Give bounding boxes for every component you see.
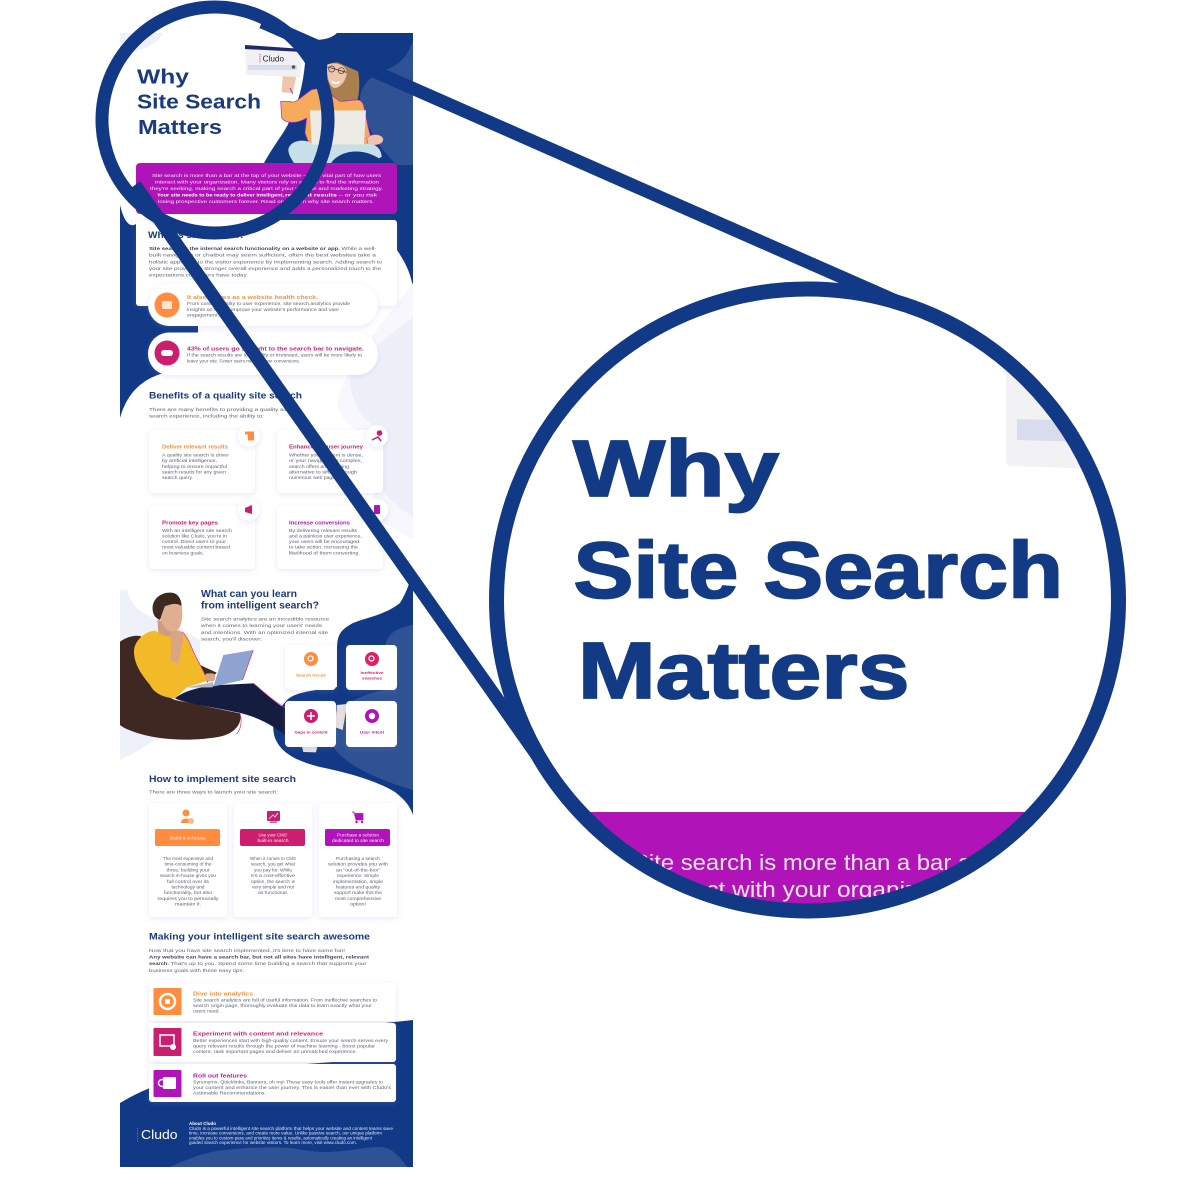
card: CMS built-in search: you pay for. While xyxy=(254,867,293,872)
card: build in-house: The most expensive and xyxy=(163,856,214,861)
tile: user intent xyxy=(346,701,397,747)
heading: making your site search awesome: Making your intelligent site search awesome xyxy=(149,932,370,942)
panel: intro banner xyxy=(136,163,397,214)
heading: making your site search awesome xyxy=(149,932,370,973)
heading: Why Site Search Matters: Matters xyxy=(138,117,222,139)
card: build in-house: search in-house gives you xyxy=(160,873,217,878)
callout: website health check: insights on how to improve your website's performance and user xyxy=(187,307,339,312)
card: promote key pages: control. Direct users to your xyxy=(162,539,226,544)
card: build in-house: maintain it. xyxy=(175,902,201,907)
enlarged search card fragment xyxy=(1006,370,1080,468)
enlarged heading: Site Search xyxy=(574,526,1063,614)
tip: dive into analytics: Dive into analytics xyxy=(193,992,253,998)
heading: what can you learn: Site search analytics are an incredible resource xyxy=(201,616,329,622)
card: increase conversions xyxy=(277,499,388,569)
heading: Why Site Search Matters: Why xyxy=(137,66,190,88)
card: deliver relevant results: search query. xyxy=(162,475,193,480)
panel: long infographic xyxy=(120,33,413,1167)
background shapes xyxy=(120,33,413,1167)
tip: dive into analytics xyxy=(149,983,396,1021)
card: purchase a solution: features and quality xyxy=(336,884,381,890)
card: Cludo search mockup xyxy=(245,45,303,77)
panel: what is site search xyxy=(136,220,397,306)
card: increase conversions: By delivering relevant results xyxy=(289,528,358,533)
heading: benefits: Benefits of a quality site search xyxy=(149,390,302,400)
heading: making your site search awesome: Now that you have site search implemented, it's time to have some fun! xyxy=(149,948,345,953)
card: build in-house xyxy=(149,803,227,917)
heading: what can you learn xyxy=(201,589,329,642)
heading: making your site search awesome: That's up to you. Spend some time building a search that supports your xyxy=(170,961,367,966)
heading: what can you learn: search, you'll discover: xyxy=(201,636,262,642)
heading: what can you learn: and intentions. With an optimized internal site xyxy=(201,630,329,635)
card: deliver relevant results: by artificial intelligence, xyxy=(162,458,217,463)
enlarged ring xyxy=(496,289,1118,911)
heading: benefits: search experience, including the ability to: xyxy=(149,414,264,418)
magnifier connector: lower line xyxy=(135,185,553,778)
card: deliver relevant results: A quality site search is driver xyxy=(162,452,229,458)
tile: user intent: User intent xyxy=(360,730,385,734)
heading: Why Site Search Matters xyxy=(137,68,260,134)
card: deliver relevant results: Deliver relevant results xyxy=(162,444,228,450)
card: purchase a solution: Purchasing a search xyxy=(336,856,381,861)
card: CMS built-in search: option, the search is xyxy=(251,879,295,884)
card: purchase a solution: Purchase a solution xyxy=(337,832,380,838)
card: CMS built-in search: built-in search xyxy=(258,838,289,843)
tip: dive into analytics: Site search analytics are full of useful information. From ineffective searches to xyxy=(193,998,377,1002)
heading: how to implement: How to implement site search xyxy=(149,774,296,784)
card: purchase a solution: support make this the xyxy=(334,890,383,895)
panel: what is site search: While a well- xyxy=(342,246,377,251)
card: increase conversions: your users will be encouraged xyxy=(289,539,359,544)
card: build in-house: Build it in-house xyxy=(170,836,207,840)
card: enhance the user journey: numerous web pages. xyxy=(289,475,339,480)
card: purchase a solution: solution provides you with xyxy=(328,862,389,867)
heading: making your site search awesome: business goals with these easy tips: xyxy=(149,968,244,973)
panel: intro banner: losing prospective customers forever. Read on to learn why site search matters. xyxy=(158,199,374,205)
illustration: woman with laptop xyxy=(281,53,387,165)
card: build in-house: full control over its xyxy=(167,879,209,884)
magnifier: enlarged view xyxy=(489,282,1126,918)
heading: what can you learn: What can you learn xyxy=(201,589,297,600)
card: deliver relevant results: helping to ensure impactful xyxy=(162,464,227,469)
tip: roll out features: Roll out features xyxy=(193,1074,247,1080)
footer text: about Cludo: Cludo is a powerful intelligent site search platform that helps your website and content teams save xyxy=(189,1126,394,1131)
card: purchase a solution: experience. Simple xyxy=(337,873,380,878)
footer text: about Cludo: enables you to custom-pass and prioritize items & results, automatically creating an intelligent xyxy=(189,1136,373,1140)
tile: ineffective searches xyxy=(346,645,397,690)
panel: intro banner: they're seeking, making search a critical part of your website and marketing strategy. xyxy=(150,186,383,192)
panel: what is site search: Site search is the internal search functionality on a website or app. xyxy=(149,246,340,251)
magnifier connector: upper line xyxy=(262,22,930,316)
heading: benefits xyxy=(149,390,302,418)
footer text: about Cludo: guided search experience for website visitors. To learn more, visit www.cludo.com. xyxy=(189,1140,357,1145)
card: build in-house: functionality, but also xyxy=(164,890,213,895)
illustration: man on beanbag xyxy=(120,593,347,752)
magnifier: small ring xyxy=(102,7,328,233)
footer text: about Cludo: time, increase conversions, and create more value. Unlike passive search, our unique platform xyxy=(189,1131,383,1136)
card: increase conversions: and a painless user experience, xyxy=(289,534,362,538)
heading: what can you learn: when it comes to learning your users' needs xyxy=(201,623,323,628)
card: Cludo search mockup: Cludo xyxy=(263,54,285,64)
footer text: about Cludo xyxy=(189,1121,394,1145)
heading: what can you learn: from intelligent search? xyxy=(201,600,319,612)
panel: what is site search: your site provides a stronger overall experience and adds a personalized touch to the xyxy=(149,266,382,271)
enlarged heading xyxy=(572,437,1058,700)
card: promote key pages: With an intelligent site search xyxy=(162,528,232,533)
tip: experiment with content: query relevant results through the power of machine learning - boost popular xyxy=(193,1044,376,1048)
tile: search trends: Search trends xyxy=(296,672,326,678)
card: increase conversions: likelihood of them converting. xyxy=(289,550,360,555)
tile: search trends xyxy=(285,645,336,690)
tile: ineffective searches: searches xyxy=(362,676,382,680)
card: CMS built-in search: search, you get what xyxy=(251,862,296,867)
tile: ineffective searches: Ineffective xyxy=(360,670,384,675)
tip: roll out features: Synonyms, Quicklinks, Banners, oh my! These easy tools offer instant upgrades to xyxy=(193,1080,383,1084)
card: enhance the user journey: or your navigation is complex, xyxy=(289,458,362,463)
card: enhance the user journey: search offers an engaging xyxy=(289,464,349,469)
heading: Why Site Search Matters: Site Search xyxy=(137,92,261,114)
callout: 43% of users: leave your site. Fewer users means fewer conversions. xyxy=(187,358,300,364)
card: CMS built-in search: as functional. xyxy=(258,890,288,895)
card: promote key pages xyxy=(149,499,260,569)
heading: how to implement xyxy=(149,774,296,794)
card: purchase a solution: an "out-of-the-box" xyxy=(336,867,381,872)
card: promote key pages: Promote key pages xyxy=(162,521,218,527)
enlarged heading: Matters xyxy=(578,626,910,715)
callout: website health check: It also serves as a website health check. xyxy=(187,295,318,301)
tip: dive into analytics: search origin page, thoroughly evaluate this data to learn exactly what your xyxy=(193,1003,373,1008)
panel: what is site search: holistic approach to the visitor experience by implementing search. Adding search to xyxy=(149,259,383,264)
heading: making your site search awesome: Any website can have a search bar, but not all sites have intelligent, relevant xyxy=(149,954,370,960)
card: CMS built-in search xyxy=(234,803,312,917)
card: deliver relevant results: search results for any given xyxy=(162,470,226,474)
card: CMS built-in search: Use your CMS' xyxy=(258,832,288,838)
card: increase conversions: Increase conversions xyxy=(289,521,350,527)
callout: website health check: engagement. xyxy=(187,312,219,318)
tile: gaps in content: Gaps in content xyxy=(294,730,328,734)
callout: website health check xyxy=(147,292,379,328)
card: purchase a solution: option! xyxy=(350,902,366,907)
card: enhance the user journey: Whether your content is dense, xyxy=(289,452,363,458)
tile: gaps in content xyxy=(285,701,336,747)
card: build in-house: requires you to personally xyxy=(158,896,220,901)
card: build in-house: three, building your xyxy=(166,867,210,872)
footer logo: Cludo: Cludo xyxy=(141,1127,178,1142)
callout: 43% of users xyxy=(148,332,378,375)
card: enhance the user journey: Enhance the user journey xyxy=(289,444,363,450)
tip: experiment with content: Experiment with content and relevance xyxy=(193,1032,324,1038)
tip: experiment with content: Better experiences start with high-quality content. Ensure your search serves every xyxy=(193,1038,389,1043)
card: promote key pages: on business goals. xyxy=(162,550,204,555)
panel: intro banner: Site search is more than a bar at the top of your website – it's a vital part of how users xyxy=(152,173,382,179)
panel: what is site search: built navigation or chatbot may seem sufficient, often the best websites take a xyxy=(149,253,377,258)
card: deliver relevant results xyxy=(149,425,260,493)
callout: 43% of users: If the search results are low quality or irrelevant, users will be more likely to xyxy=(187,352,362,358)
card: build in-house: technology and xyxy=(172,884,205,890)
card: CMS built-in search: When it comes to CMS xyxy=(250,856,296,861)
tip: roll out features: your content and enhance the user journey. This is easier than ever with Cludo's xyxy=(193,1085,392,1090)
heading: benefits: There are many benefits to providing a quality site xyxy=(149,407,291,412)
panel: intro banner: Your site needs to be ready to deliver intelligent, xyxy=(157,192,285,198)
card: purchase a solution: dedicated to site search xyxy=(332,838,385,843)
tip: roll out features: Actionable Recommendations. xyxy=(193,1090,266,1096)
panel: what is site search: What is site search? xyxy=(148,230,245,240)
enlarged banner xyxy=(590,812,1025,904)
card: promote key pages: most valuable content based xyxy=(162,545,230,550)
card: purchase a solution: most comprehensive xyxy=(335,896,382,901)
card: purchase a solution: implementation, ample xyxy=(333,879,384,884)
card: CMS built-in search: it's a cost-effective xyxy=(251,873,296,878)
enlarged heading: Why xyxy=(573,424,780,513)
panel: what is site search: expectations customers have today. xyxy=(149,273,248,278)
heading: making your site search awesome: search. xyxy=(149,961,169,966)
footer text: about Cludo: About Cludo xyxy=(189,1121,216,1126)
card: increase conversions: to take action, increasing the xyxy=(289,545,358,550)
panel: intro banner: relevant results – or you risk xyxy=(285,192,378,198)
card: enhance the user journey: alternative to sifting through xyxy=(289,470,357,474)
tip: experiment with content: content, rank important pages and deliver an unmatched experience. xyxy=(193,1049,357,1054)
card: enhance the user journey xyxy=(277,425,388,493)
heading: how to implement: There are three ways to launch your site search: xyxy=(149,790,278,794)
card: build in-house: time-consuming of the xyxy=(164,862,212,867)
tip: roll out features xyxy=(149,1064,396,1102)
callout: website health check: From content quality to user experience, site search analytics provide xyxy=(187,301,350,306)
tip: dive into analytics: users need. xyxy=(193,1008,220,1014)
callout: 43% of users: 43% of users go straight to the search bar to navigate. xyxy=(187,346,364,352)
card: purchase a solution xyxy=(319,803,397,917)
card: CMS built-in search: very simple and not xyxy=(252,884,295,890)
card: promote key pages: solution like Cludo, you're in xyxy=(162,534,227,538)
panel: intro banner: interact with your organization. Many visitors rely on search to find the information xyxy=(155,180,379,186)
tip: experiment with content xyxy=(149,1023,396,1062)
